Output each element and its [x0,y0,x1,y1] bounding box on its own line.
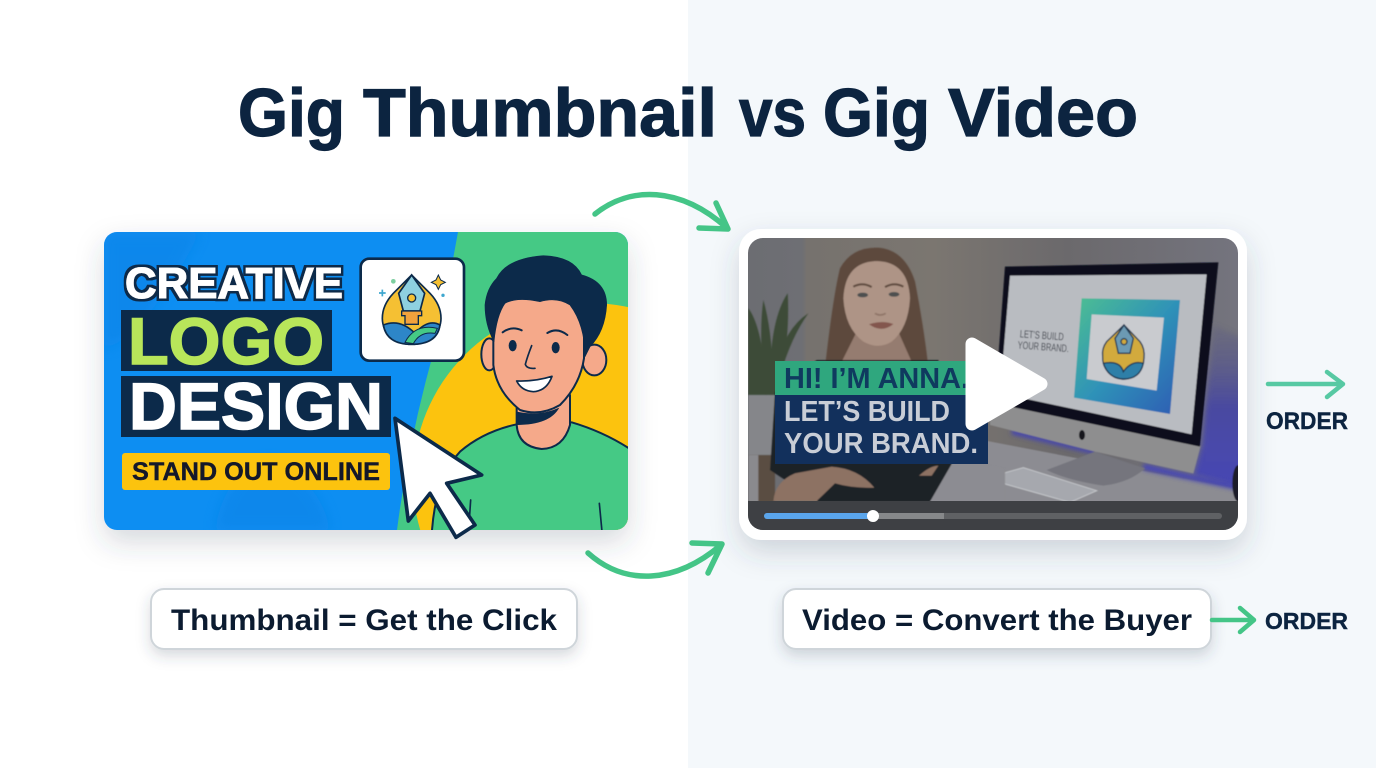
caption: green line [775,361,969,395]
face [843,261,910,346]
right ear [582,345,606,375]
blue background shapes [104,232,116,244]
artwork square [1074,298,1180,414]
monitor bezel [995,262,1218,447]
room wall [748,238,1238,530]
pill: video equals convert the buyer [783,589,1211,649]
caption: navy lines [775,395,988,464]
badge card [361,259,464,361]
label: bottom order: ORDER [1265,608,1348,634]
smile [517,376,552,392]
caption line three: YOUR BRAND. [784,428,978,460]
caption navy background [775,395,988,464]
apple logo [1079,430,1085,440]
arrow: to order [1268,372,1343,397]
nose [525,346,535,368]
green wave [405,327,437,344]
blue glow [1193,323,1238,484]
icon: play button [972,344,1041,424]
monitor chin [990,402,1201,473]
video white frame [739,229,1247,540]
blue strip under chin right [1143,463,1237,490]
artwork inner card [1087,314,1164,391]
keyboard [1004,466,1098,501]
eyes [509,340,517,351]
woman and plant [748,248,1005,502]
pen nib [399,275,425,311]
tag background [122,453,390,490]
person illustration [432,256,630,535]
progress track [764,513,1222,519]
title: Video [948,75,1138,151]
thumbnail card [104,232,628,530]
progress knob [867,510,879,522]
nose [875,313,886,315]
plant leaves [748,293,808,395]
panel: video player [739,229,1247,540]
dark object at right edge [1232,464,1238,501]
left ear [481,338,497,370]
title: Gig [823,75,930,151]
label: order: ORDER [1266,408,1348,435]
blue strip under monitor [1012,429,1097,455]
eyebrows [853,284,903,287]
waves [383,323,440,344]
plus [379,290,386,296]
monitor scene [982,262,1238,501]
screen text: YOUR BRAND. [1017,340,1069,355]
green background panel [397,232,628,530]
nib hole [408,294,416,302]
face [493,295,584,412]
neck [842,332,912,362]
arrow: top curved arrow from thumbnail to video [595,194,728,229]
nib barrel [402,311,422,324]
sparkle [431,275,445,289]
video scene [748,238,1244,530]
caption line two: LET’S BUILD [784,396,950,428]
table edge [748,455,775,502]
droplet body [382,275,441,344]
tag: stand out online [122,453,390,490]
headline: logo: LOGO [128,304,324,378]
title: vs [739,75,806,151]
hair [485,256,607,357]
control bar [748,501,1238,530]
yellow circle [416,304,628,530]
torso [770,360,955,502]
eyebrows [503,328,567,335]
screen logo [1102,325,1144,379]
caption green text: HI! I’M ANNA. [784,363,969,395]
background: right pale blue half [688,0,1376,768]
headline: creative: CREATIVE [125,259,343,308]
background: left white half [0,0,688,768]
title: Thumbnail [363,75,717,151]
table leg [748,455,758,502]
thumbnail artwork [104,232,628,530]
pill background [783,589,1211,649]
screen text: LET'S BUILD [1019,328,1064,343]
left forearm and hand [773,467,874,501]
progress buffered [868,513,944,519]
neck [517,395,570,449]
arrow: pill to order [1212,608,1254,632]
mouth [869,322,893,329]
eyes [857,292,899,297]
tag text: STAND OUT ONLINE [132,458,380,486]
icon: mouse cursor [395,418,482,537]
pill text: Video = Convert the Buyer [802,604,1192,637]
monitor screen [1000,274,1207,434]
right hand [919,466,938,476]
neck shadow [517,408,559,425]
plant pot [748,395,777,455]
headline box: logo [121,310,332,371]
desk at right of woman [930,458,1005,502]
pill: thumbnail equals get the click [151,589,577,649]
headline box: design [121,376,391,437]
title [238,75,1138,151]
icon: logo badge [361,259,464,361]
panel: thumbnail [91,231,641,555]
screen text [1018,330,1068,352]
desk [982,440,1238,501]
caption green background [775,361,967,395]
hair [826,248,928,362]
pill text: Thumbnail = Get the Click [171,604,557,637]
arrow: bottom curved arrow from thumbnail to video [588,543,722,576]
shirt fold lines [469,499,603,530]
progress played [764,513,873,519]
monitor stand [1047,452,1145,486]
title: Gig [238,75,345,151]
headline: design: DESIGN [129,369,383,443]
pill background [151,589,577,649]
dots [391,279,445,297]
shirt [432,422,630,535]
